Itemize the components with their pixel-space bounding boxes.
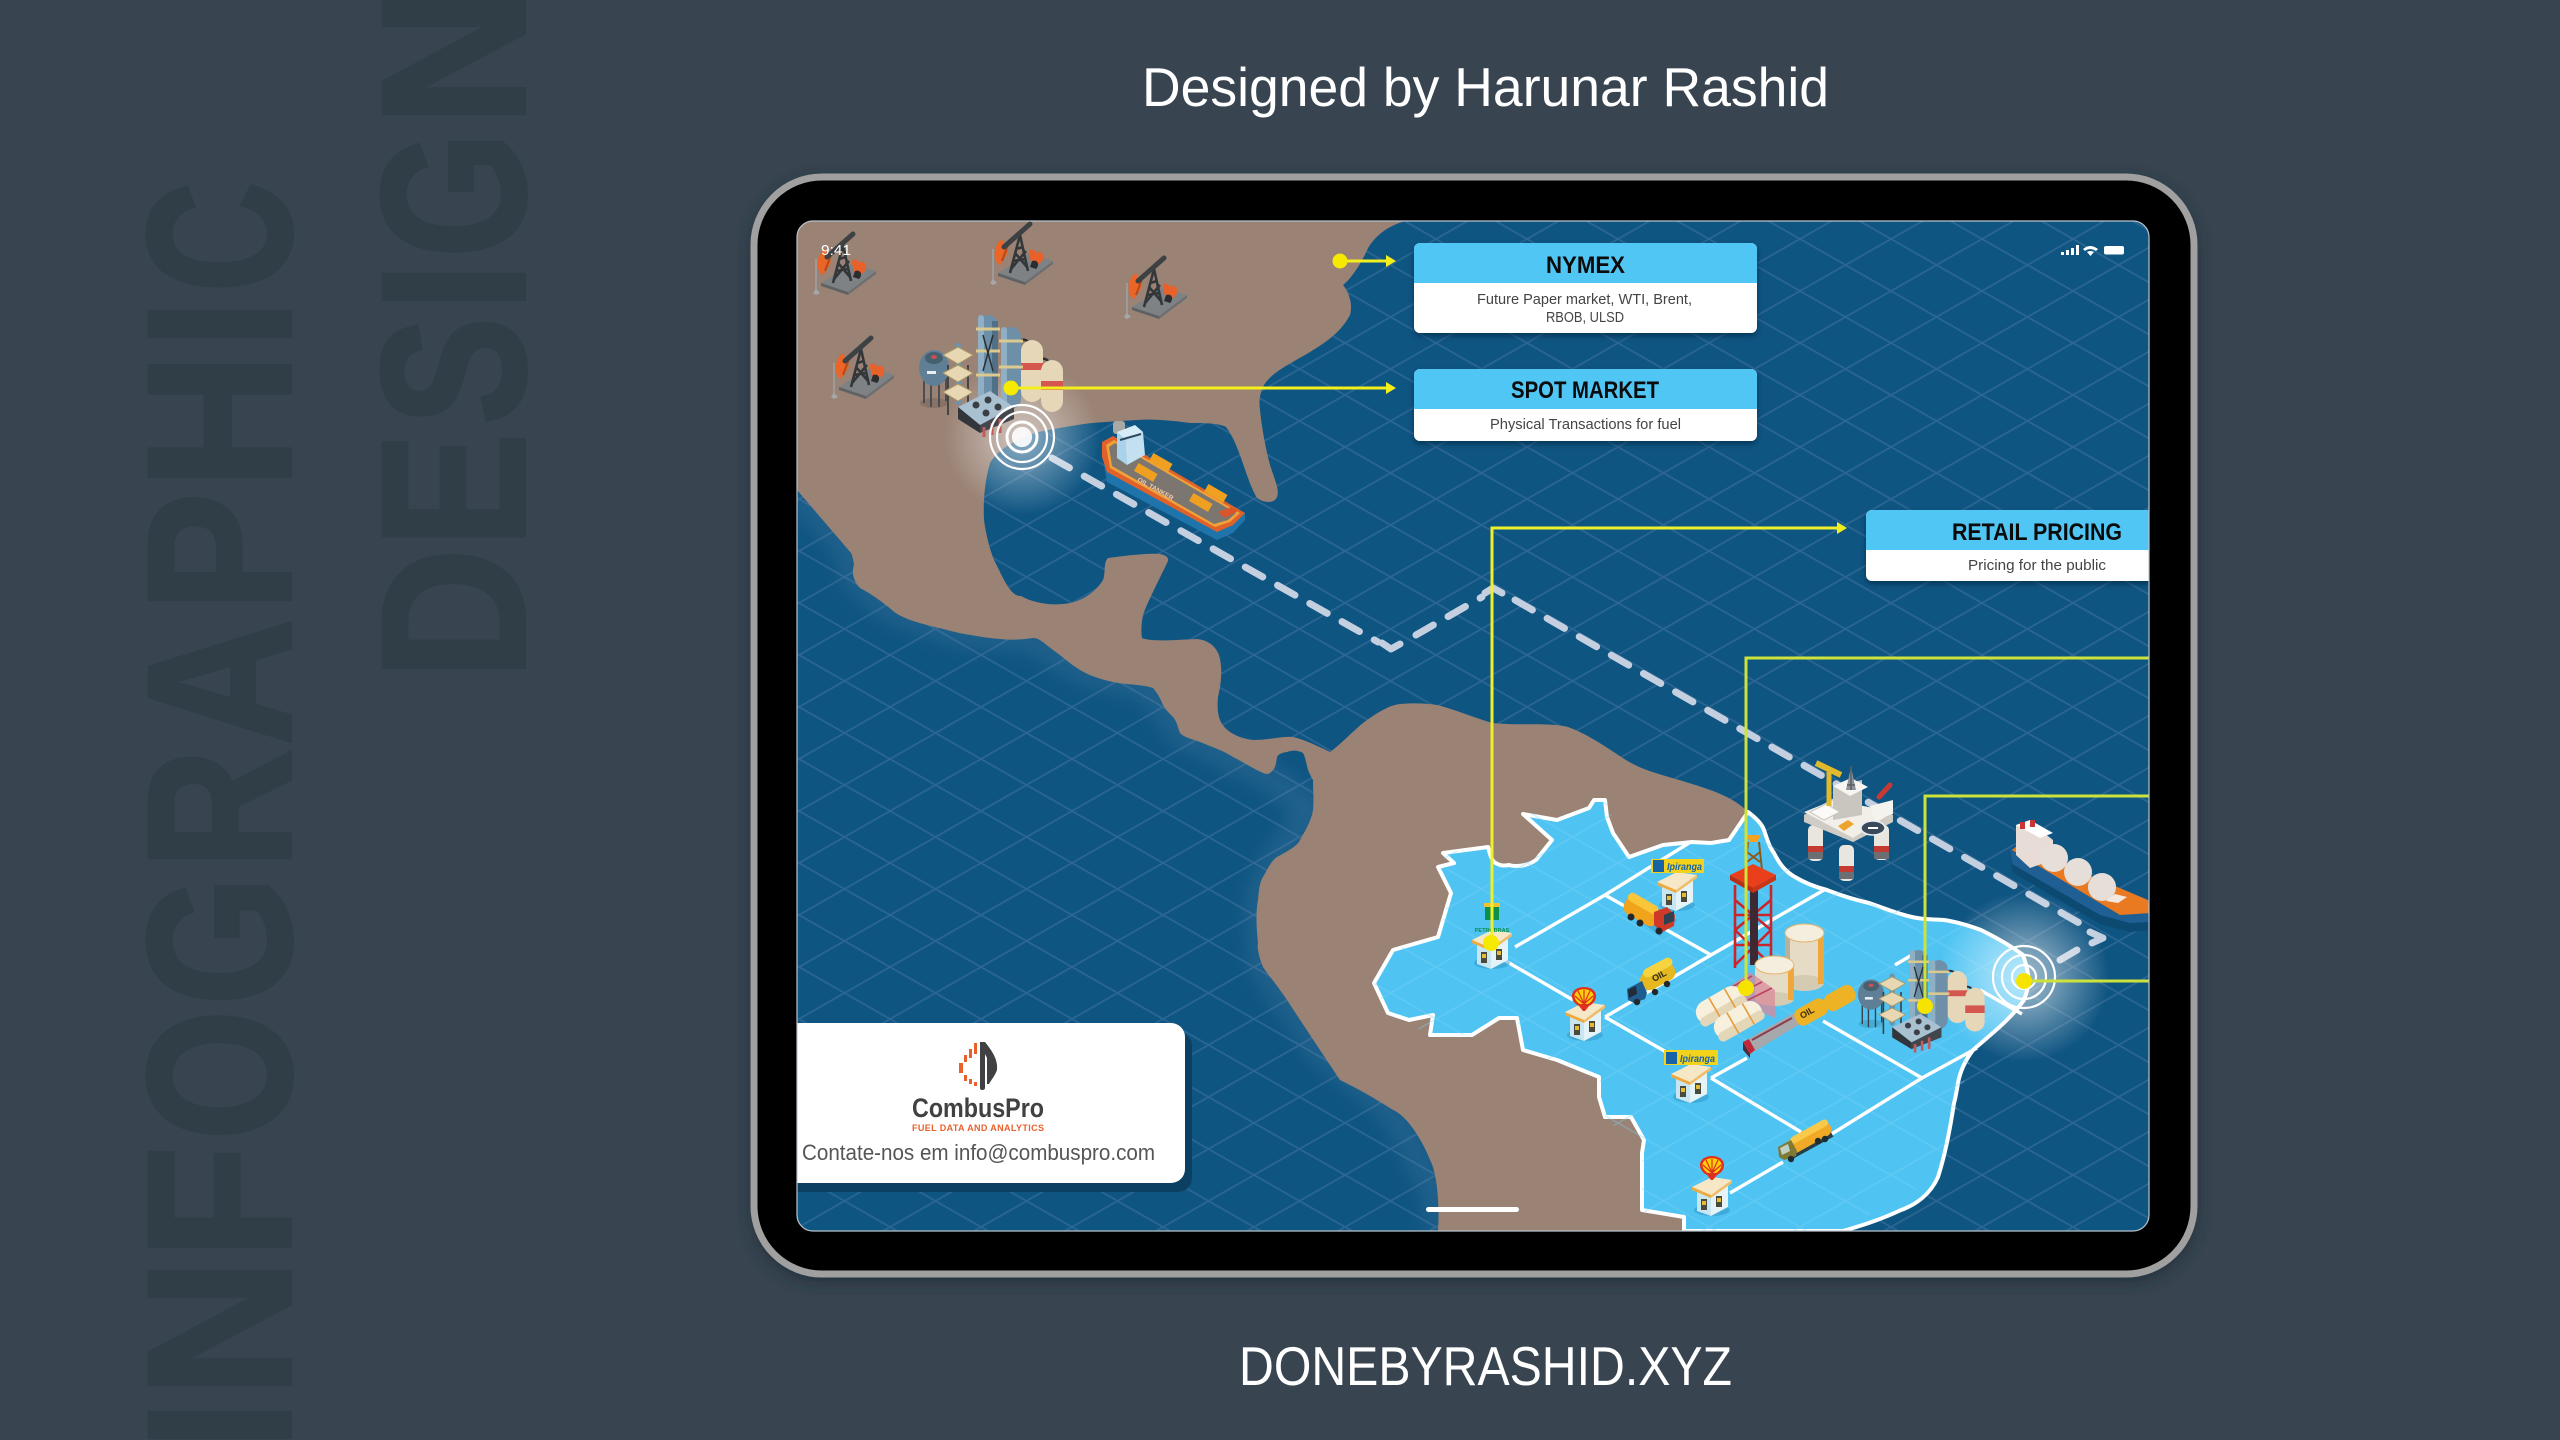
Brazil faint grid [1374, 800, 2023, 1231]
tablet screen: map [780, 221, 2166, 1231]
glow: North America port [952, 371, 1095, 510]
wagon labels: OIL [1798, 1004, 1817, 1021]
arrow: dot to NYMEX [1332, 254, 1396, 268]
watermark: INFOGRAPHIC vertical text: C [107, 182, 334, 292]
NYMEX heading: NYMEX [1546, 252, 1625, 279]
icon: oil tanker ship [1102, 421, 1245, 540]
watermark: DESIGN vertical text: I [341, 263, 568, 311]
icon: CombusPro logo [959, 1042, 997, 1090]
icon: tanker truck blue cab [1627, 956, 1678, 1005]
icon: pump jack 2 [990, 224, 1053, 285]
spot market description: Physical Transactions for fuel [1490, 416, 1681, 433]
land: Americas [797, 221, 1748, 1231]
watermark: DESIGN vertical text: D [339, 548, 567, 680]
icon: horizontal gas tanks [1691, 972, 1775, 1043]
pacific coast glow [797, 490, 1438, 1231]
icon: fuel train [1743, 982, 1858, 1058]
panel: NYMEX [1414, 243, 1757, 333]
watermark: INFOGRAPHIC vertical text [105, 182, 334, 1440]
icon: North America refinery [919, 315, 1063, 437]
CombusPro tagline: FUEL DATA AND ANALYTICS [912, 1123, 1044, 1133]
Brazil map [1374, 800, 2028, 1231]
rings: North America port [990, 405, 1054, 469]
icon: Ipiranga station north [1651, 859, 1704, 911]
retail pricing heading: RETAIL PRICING [1952, 519, 2122, 546]
icon: pump jack 3 [1124, 258, 1187, 319]
website footer: DONEBYRASHID.XYZ [1239, 1335, 1732, 1397]
icon: pump jack 1 [813, 234, 876, 295]
watermark: INFOGRAPHIC vertical text: F [106, 1146, 334, 1258]
watermark: INFOGRAPHIC vertical text: A [107, 619, 334, 745]
icon: tanker truck olive cab [1778, 1118, 1834, 1162]
connector: Brazil refinery line [1917, 796, 2149, 1014]
Ipiranga label: Ipiranga [1680, 1054, 1715, 1065]
screen border [797, 221, 2149, 1231]
connector: Brazil port line [2016, 973, 2149, 989]
watermark: INFOGRAPHIC vertical text: P [105, 493, 334, 611]
icon: Shell station south [1692, 1156, 1732, 1216]
watermark: INFOGRAPHIC vertical text: I [107, 300, 334, 348]
icon: Brazil refinery [1858, 950, 1985, 1052]
road network [1504, 843, 2022, 1193]
watermark: INFOGRAPHIC vertical text: H [106, 353, 334, 489]
status bar time: 9:41 [821, 242, 851, 259]
icon: Shell station west [1565, 987, 1605, 1041]
panel: CombusPro contact card [780, 1023, 1192, 1192]
watermark: DESIGN vertical text: E [339, 433, 567, 547]
arrow: Petrobras station to retail pricing [1483, 522, 1847, 951]
watermark: INFOGRAPHIC vertical text: N [106, 1259, 333, 1397]
icon: drilling tower [1730, 835, 1776, 968]
icon: Ipiranga station south [1664, 1050, 1718, 1103]
watermark: DESIGN vertical text [339, 0, 568, 680]
title: Designed by Harunar Rashid [1142, 56, 1829, 118]
watermark: INFOGRAPHIC vertical text: G [106, 877, 334, 1005]
NYMEX description: Future Paper market, WTI, Brent, [1477, 291, 1692, 308]
Petrobras label: PETROBRAS [1475, 928, 1510, 934]
NYMEX description: RBOB, ULSD [1546, 309, 1624, 326]
watermark: INFOGRAPHIC vertical text: R [106, 749, 334, 869]
status bar icons [2061, 245, 2124, 256]
panel: spot market [1414, 369, 1757, 441]
rings: Brazil port [1993, 946, 2055, 1008]
tablet frame [754, 177, 2194, 1274]
icon: storage tanks [1755, 924, 1824, 1006]
watermark: DESIGN vertical text: G [340, 132, 567, 258]
Brazil fill [1374, 800, 2028, 1231]
connector: tank farm line [1738, 658, 2149, 996]
arrow: refinery to spot market [1004, 380, 1396, 396]
Ipiranga label: Ipiranga [1667, 862, 1702, 873]
icon: pump jack 4 [831, 338, 894, 399]
contact line: Contate-nos em info@combuspro.com [802, 1140, 1155, 1165]
glow: Brazil port [1946, 896, 2104, 1058]
spot market heading: SPOT MARKET [1511, 377, 1659, 404]
icon: LNG ship [2010, 820, 2150, 932]
home indicator bar [1426, 1207, 1519, 1212]
retail pricing description: Pricing for the public [1968, 557, 2107, 574]
dashed shipping route [1052, 458, 2103, 960]
ship label: OIL TANKER [1136, 477, 1175, 502]
watermark: DESIGN vertical text: S [340, 317, 567, 425]
CombusPro wordmark: CombusPro [912, 1093, 1044, 1123]
ocean grid [797, 221, 2149, 1231]
icon: tanker truck red cab [1621, 891, 1677, 936]
icon: Petrobras station [1472, 903, 1512, 969]
watermark: INFOGRAPHIC vertical text: O [105, 1010, 334, 1140]
panel: retail pricing [1866, 510, 2166, 581]
tank label: OIL [1650, 968, 1669, 984]
icon: offshore platform [1804, 763, 1893, 881]
